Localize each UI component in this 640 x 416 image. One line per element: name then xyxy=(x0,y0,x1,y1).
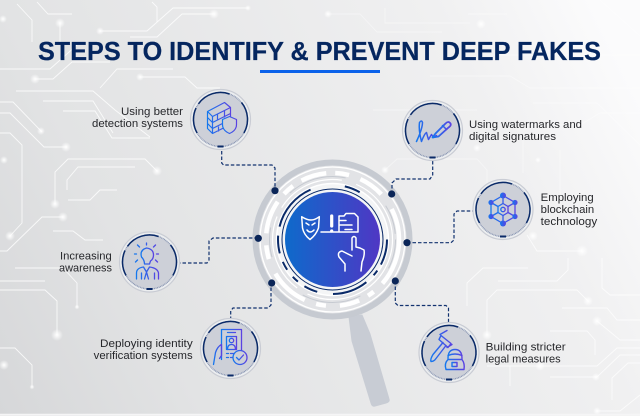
label xyxy=(94,338,193,362)
connector: identity verification xyxy=(231,283,271,320)
label: Employing xyxy=(541,192,594,204)
connector: watermarks xyxy=(392,161,433,194)
label xyxy=(92,106,184,130)
lens disc xyxy=(285,192,380,287)
badge with signature icon xyxy=(402,100,462,160)
label: legal measures xyxy=(486,353,561,365)
connector: awareness xyxy=(177,238,258,263)
label xyxy=(486,341,566,365)
label: Deploying identity xyxy=(100,338,193,350)
badge with gavel and hacker icon xyxy=(419,322,479,382)
label: technology xyxy=(541,216,598,228)
label: Using watermarks and xyxy=(469,119,582,131)
badge with ID card icon xyxy=(200,318,260,378)
label: Building stricter xyxy=(486,341,566,353)
badge with lightbulb person icon xyxy=(120,232,180,292)
label: verification systems xyxy=(94,350,193,362)
label: detection systems xyxy=(92,118,184,130)
label xyxy=(59,251,112,274)
title underline xyxy=(260,70,380,73)
step: better detection systems xyxy=(92,90,250,150)
label: Increasing xyxy=(60,251,112,263)
label xyxy=(541,192,598,228)
label xyxy=(469,119,582,143)
step: blockchain technology xyxy=(473,180,598,240)
connector: blockchain xyxy=(407,211,477,243)
badge with firewall icon xyxy=(190,90,250,150)
step: stricter legal measures xyxy=(419,322,566,382)
step: identity verification systems xyxy=(94,318,260,378)
title: STEPS TO IDENTIFY & PREVENT DEEP FAKES xyxy=(38,36,601,66)
step: increasing awareness xyxy=(59,232,180,292)
label: digital signatures xyxy=(469,131,557,143)
magnifying glass xyxy=(256,162,410,406)
icon: mask, alert, card and pointing hand xyxy=(302,214,364,271)
magnifier handle xyxy=(349,315,389,406)
label: blockchain xyxy=(541,204,594,216)
connector: legal measures xyxy=(395,281,448,323)
connector: detection systems xyxy=(222,151,275,190)
connector dots xyxy=(255,187,411,287)
label: awareness xyxy=(59,262,112,274)
step: watermarks and digital signatures xyxy=(402,100,582,160)
lens rings xyxy=(256,162,410,316)
frame edge xyxy=(0,414,640,416)
badge with blockchain icon xyxy=(473,180,533,240)
label: Using better xyxy=(121,106,183,118)
